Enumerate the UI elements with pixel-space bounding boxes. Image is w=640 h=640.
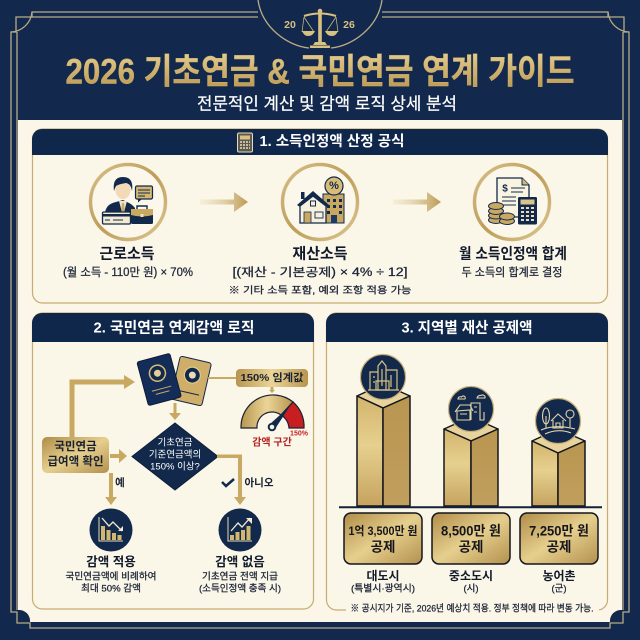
outcome: reduction applied: 국민연금액에 비례하여 [66,570,156,582]
decision diamond: 기준연금액의 [149,448,201,460]
panel 3 header bar [326,313,608,342]
label: rural: (군) [551,584,567,594]
outcome: no reduction: 기초연금 전액 지급 [202,570,278,582]
label: mid city: 중소도시 [449,569,493,583]
deduction box: metropolis [344,513,422,564]
label: rural [542,569,576,594]
threshold badge: 150% 임계값 [240,371,304,384]
arrow: income to property [200,192,248,212]
panel 1 heading: 1. 소득인정액 산정 공식 [260,133,404,150]
label: yes: 예 [115,476,125,489]
label: mid city: (시) [463,584,479,594]
label: metropolis: 대도시 [366,569,400,583]
line: passports to threshold [208,377,237,379]
deduction box: rural: 7,250만 원 [529,524,589,538]
outcome: reduction applied: 감액 적용 [86,555,136,569]
decision diamond [132,423,218,490]
outcome: no reduction [199,555,281,594]
property text block: ※ 기타 소득 포함, 예외 조항 적용 가능 [228,284,412,296]
icon: calculator [238,133,252,152]
arrow: threshold to gauge [269,387,275,393]
panel 2 heading: 2. 국민연금 연계감액 로직 [94,320,254,336]
decision diamond: 150% 이상? [150,462,200,472]
arrow: yes branch [105,473,117,505]
deduction box: mid city: 8,500만 원 [441,524,501,538]
baseline [339,506,602,508]
cream content sheet [18,120,622,622]
label: no: 아니오 [245,477,274,489]
icon: rising bars [218,508,262,552]
emblem: scales with year: 26 [343,19,355,31]
outcome: no reduction: (소득인정액 충족 시) [199,582,281,594]
total text block: 월 소득인정액 합계 [459,246,567,262]
deduction box: metropolis: 1억 3,500만 원 [348,524,418,538]
outcome: reduction applied [66,555,156,594]
arrow: no branch [217,454,246,505]
icon: falling bars [90,508,132,552]
arrow: passports to decision [169,403,181,420]
property text block: [(재산 - 기본공제) × 4% ÷ 12] [232,266,408,279]
gauge: reduction zone [241,395,309,448]
outcome: no reduction: 감액 없음 [215,555,265,569]
income text block: 근로소득 [99,246,155,262]
icon: earned income worker [90,164,166,240]
gauge: reduction zone: 150% [290,430,309,438]
property text block [228,246,412,296]
start box: 국민연금 [54,440,97,453]
title: 2026 기초연금 & 국민연금 연계 가이드 [66,52,574,92]
emblem: scales with year [284,9,355,48]
icon: town [448,386,494,432]
footnote: ※ 공시지가 기준, 2026년 예상치 적용. 정부 정책에 따라 변동 가능. [350,602,594,614]
icon: check mark [222,479,234,486]
icon: monthly total document, coins, calculator [474,164,550,240]
panel 2 header bar [32,313,314,342]
pillar: metropolis [357,384,410,506]
start box: 급여액 확인 [47,454,104,468]
deduction box: metropolis: 공제 [371,540,395,554]
property text block: 재산소득 [292,246,348,262]
icon: skyline [360,354,406,400]
icon: pension passports [137,353,212,406]
arrow: property to total [393,192,441,212]
pillar: mid city [444,417,498,506]
icon: countryside [536,398,580,444]
label: mid city [449,569,493,594]
deduction box: rural [520,513,598,564]
emblem: scales with year: 20 [284,19,296,31]
panel 2: pension reduction logic [32,313,314,609]
arrow: box to diamond [110,449,127,463]
total text block [459,246,567,279]
income text block: (월 소득 - 110만 원) × 70% [63,265,193,279]
deduction box: mid city [432,513,510,564]
total text block: 두 소득의 합계로 결정 [462,266,562,279]
panel 3 heading: 3. 지역별 재산 공제액 [402,320,532,336]
icon: property income house: % [329,180,339,192]
deduction box: mid city: 공제 [459,540,483,554]
panel 1 header bar [32,129,608,155]
icon: monthly total document, coins, calculator: $ [502,184,508,194]
threshold badge [236,369,308,387]
pillar: rural [532,429,585,506]
label: metropolis [351,569,415,594]
decision diamond: 기초연금 [158,438,193,448]
arrow: check box to passports [70,375,135,437]
deduction box: rural: 공제 [547,540,571,554]
start box [42,437,109,473]
label: metropolis: (특별시·광역시) [351,582,415,594]
label: rural: 농어촌 [542,569,576,583]
income text block [63,246,193,279]
icon: property income house [282,164,358,240]
subtitle: 전문적인 계산 및 감액 로직 상세 분석 [197,94,457,114]
panel 1: income formula [32,129,608,303]
outcome: reduction applied: 최대 50% 감액 [81,582,141,594]
gauge: reduction zone: 감액 구간 [252,436,292,448]
panel 3: regional property deduction [326,313,608,615]
